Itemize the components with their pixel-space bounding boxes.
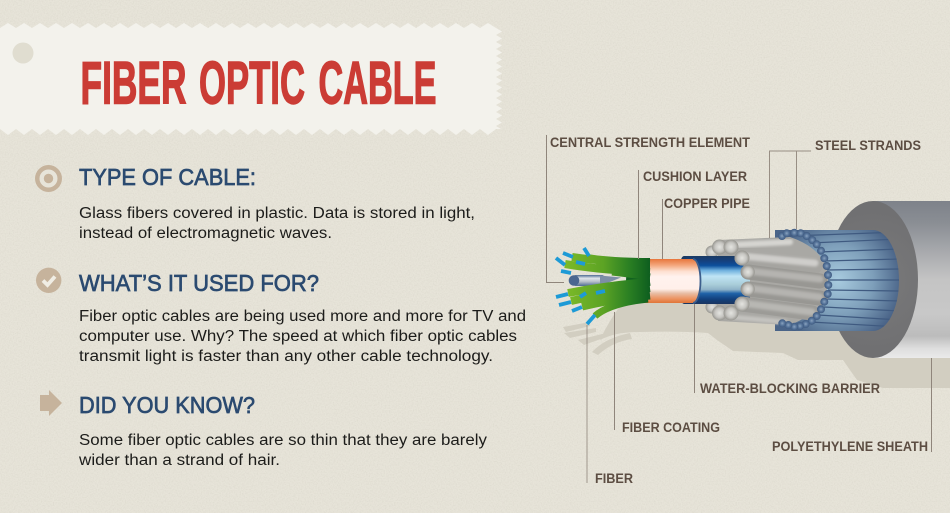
bead ring [778,229,832,331]
text: did you know: Some fiber optic cables are so thin that they are barely [79,432,487,449]
label: steel strands: STEEL STRANDS [815,138,921,153]
title [80,50,436,116]
icon: check mark [36,268,61,293]
heading: did you know: DID YOU KNOW? [79,392,255,418]
icon: arrow [40,390,62,416]
glass fiber tips [556,248,605,324]
cable shadow [563,300,950,388]
label: fiber: FIBER [595,471,633,486]
text: what's it used for [79,308,526,365]
text: did you know [78,432,487,469]
fiber coating strands [565,257,650,316]
title: FIBER [80,50,186,116]
title banner [0,23,502,135]
water-blocking barrier [678,256,750,304]
front steel tubes [734,250,820,313]
text: type of cable: instead of electromagnetic waves. [79,225,332,242]
text: did you know: wider than a strand of hair. [78,452,280,469]
label: cushion layer [638,169,747,259]
fibers with coating [556,248,650,324]
section: did you know [40,390,487,469]
section: type of cable [35,164,475,242]
text: what's it used for: computer use. Why? The speed at which fiber optic cables [79,328,517,345]
label: copper pipe: COPPER PIPE [664,196,750,211]
label: polyethylene sheath: POLYETHYLENE SHEATH [772,439,928,454]
title: OPTIC [199,50,305,116]
copper pipe [637,259,700,303]
central strength element [569,275,621,286]
label: fiber coating [614,312,720,435]
text: what's it used for: transmit light is faster than any other cable technology. [79,348,493,365]
label: copper pipe [662,196,750,259]
text: type of cable [79,205,475,242]
section: what's it used for [36,268,526,365]
text: type of cable: Glass fibers covered in plastic. Data is stored in light, [79,205,475,222]
text: what's it used for: Fiber optic cables are being used more and more for TV and [79,308,526,325]
back steel tubes [706,237,828,325]
label: water-blocking barrier: WATER-BLOCKING BARRIER [700,381,880,396]
label: fiber coating: FIBER COATING [622,420,720,435]
cable diagram [556,201,950,388]
polyethylene sheath [828,201,950,358]
heading: what's it used for: WHAT’S IT USED FOR? [79,270,319,296]
icon: target [35,165,62,192]
label: steel strands [770,138,921,238]
heading: type of cable: TYPE OF CABLE: [79,164,256,190]
title: CABLE [318,50,436,116]
steel strand armor [775,230,905,331]
cushion layer [626,259,650,303]
label: central strength element: CENTRAL STRENGTH ELEMENT [550,135,751,150]
label: cushion layer: CUSHION LAYER [643,169,747,184]
label: central strength element [546,135,751,282]
